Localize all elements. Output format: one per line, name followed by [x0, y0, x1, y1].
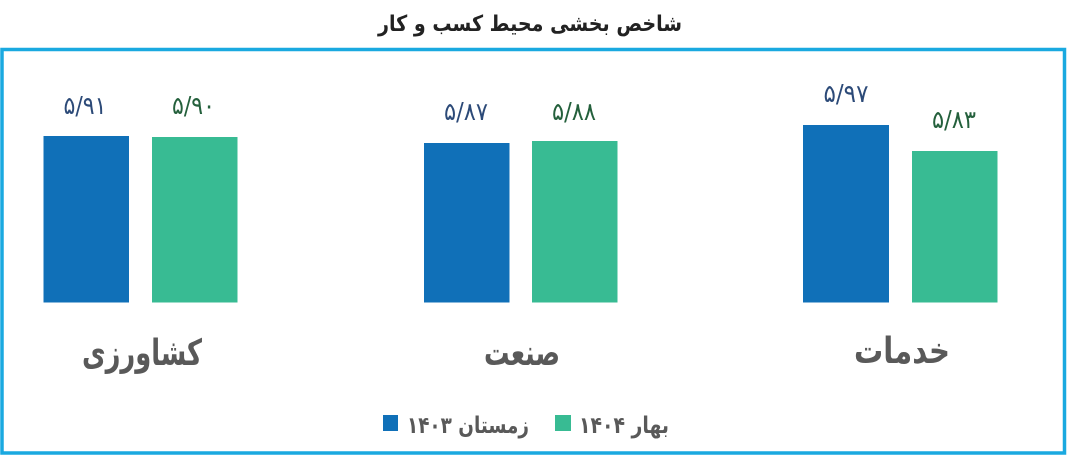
legend swatch: winter 1403	[383, 415, 398, 431]
legend label: winter 1403: زمستان ۱۴۰۳	[407, 413, 529, 439]
value: agriculture spring 1404: ۵/۹۰	[172, 91, 215, 120]
value: industry winter 1403: ۵/۸۷	[444, 97, 488, 126]
bar: services spring 1404	[912, 151, 998, 302]
bar chart: agriculture	[44, 91, 238, 302]
title: شاخص بخشی محیط کسب و کار	[377, 12, 682, 37]
category label: services: خدمات	[854, 331, 950, 372]
bar: services winter 1403	[803, 125, 889, 302]
bar: agriculture winter 1403	[44, 136, 129, 302]
value: services spring 1404: ۵/۸۳	[932, 105, 976, 134]
bar chart: industry	[424, 97, 618, 302]
value: agriculture winter 1403: ۵/۹۱	[64, 91, 106, 120]
value: industry spring 1404: ۵/۸۸	[552, 97, 596, 126]
legend swatch: spring 1404	[555, 415, 571, 431]
bar: agriculture spring 1404	[152, 137, 238, 302]
legend	[383, 413, 669, 439]
legend label: spring 1404: بهار ۱۴۰۴	[579, 413, 669, 439]
bar: industry spring 1404	[532, 141, 618, 302]
category label: agriculture: کشاورزی	[82, 333, 202, 374]
value: services winter 1403: ۵/۹۷	[824, 79, 868, 108]
bar: industry winter 1403	[424, 143, 510, 302]
category label: industry: صنعت	[484, 333, 560, 374]
bar chart: services	[803, 79, 998, 302]
